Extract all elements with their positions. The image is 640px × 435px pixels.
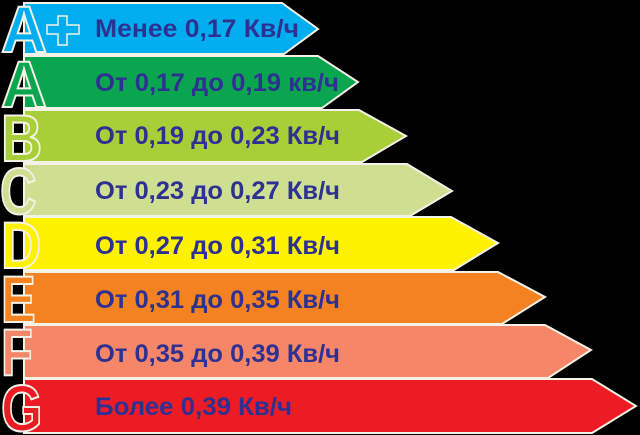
arrow row: G — [1, 371, 636, 435]
arrow row: E — [1, 262, 545, 336]
label: E: От 0,31 до 0,35 Кв/ч — [95, 286, 340, 314]
icon: plus sign — [47, 16, 79, 45]
letter: D: D — [1, 207, 41, 282]
letter: E: E — [1, 262, 36, 336]
letter: C: C — [0, 154, 37, 229]
arrow row: C — [0, 154, 452, 229]
letter: F: F — [1, 315, 33, 389]
arrow row: B — [1, 102, 406, 176]
label: F: От 0,35 до 0,39 Кв/ч — [95, 340, 340, 368]
letter: A: A — [1, 47, 47, 121]
label: B: От 0,19 до 0,23 Кв/ч — [95, 122, 340, 150]
label: C: От 0,23 до 0,27 Кв/ч — [95, 177, 340, 205]
arrow row: A+ — [1, 0, 318, 66]
arrow row: D — [1, 207, 498, 282]
label: D: От 0,27 до 0,31 Кв/ч — [95, 232, 340, 260]
label: A: От 0,17 до 0,19 кв/ч — [95, 69, 339, 97]
arrow row: A — [1, 47, 358, 121]
label: A+: Менее 0,17 Кв/ч — [95, 15, 299, 43]
letter: B: B — [1, 102, 42, 176]
arrow row: F — [1, 315, 591, 389]
label: G: Более 0,39 Кв/ч — [95, 393, 292, 421]
